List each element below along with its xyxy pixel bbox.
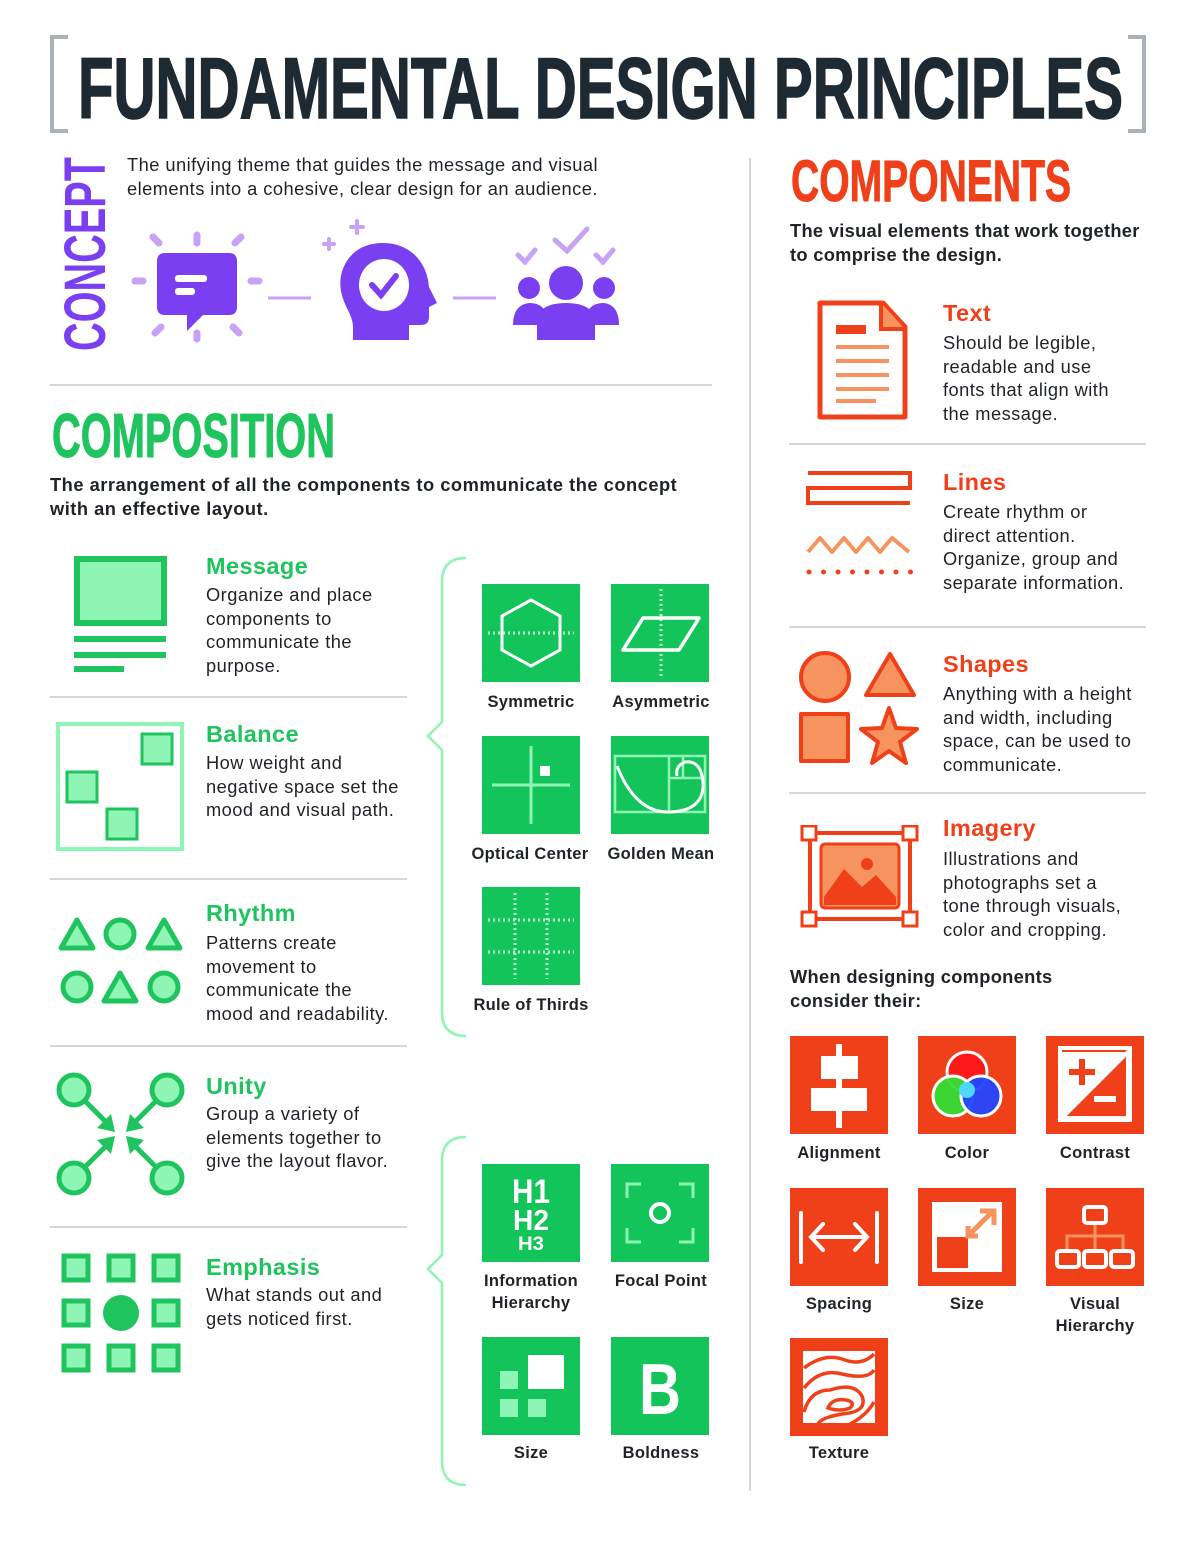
tile: texture (780, 1337, 898, 1467)
item: balance: negative space set the (206, 776, 399, 796)
item: unity: Group a variety of (206, 1103, 359, 1124)
tile: size (components) (908, 1187, 1026, 1317)
item: text: fonts that align with (943, 379, 1109, 400)
tile: spacing (780, 1187, 898, 1317)
icon: audience (513, 229, 619, 340)
tile: rule of thirds (473, 887, 589, 1014)
item: shapes: communicate. (943, 754, 1062, 774)
tile: information hierarchy (482, 1164, 580, 1312)
icon: unity (56, 1072, 184, 1196)
icon: imagery (800, 825, 918, 928)
tile: information hierarchy: H1 (512, 1173, 550, 1211)
item: rhythm (58, 900, 389, 1024)
tile: rule of thirds: Rule of Thirds (473, 996, 589, 1014)
item: emphasis (62, 1254, 382, 1372)
item: text (818, 300, 1109, 424)
tile: information hierarchy: Information (484, 1272, 578, 1290)
tile: visual hierarchy: Visual (1070, 1295, 1120, 1313)
icon: lines (806, 471, 913, 574)
icon: rhythm (58, 918, 182, 1004)
concept description (127, 154, 598, 199)
tile: information hierarchy: H2 (513, 1205, 549, 1237)
icon: head with check (324, 221, 437, 340)
item: text: Should be legible, (943, 332, 1096, 353)
tile: symmetric: Symmetric (487, 693, 575, 711)
item: unity: give the layout flavor. (206, 1150, 388, 1171)
item: lines (806, 469, 1124, 593)
item: emphasis: What stands out and (206, 1284, 382, 1305)
item: imagery: color and cropping. (943, 918, 1107, 940)
brace: layout types (426, 556, 466, 1038)
composition description: with an effective layout. (50, 498, 269, 518)
tile: size (482, 1337, 580, 1462)
tile: optical center (472, 736, 588, 863)
item: shapes (799, 651, 1132, 774)
tile: size: Size (514, 1444, 548, 1462)
concept description: elements into a cohesive, clear design for an audience. (127, 178, 598, 198)
item: rhythm: communicate the (206, 979, 352, 1000)
item: unity (56, 1072, 388, 1196)
tile: visual hierarchy (1036, 1187, 1154, 1337)
tile: texture: Texture (809, 1444, 869, 1462)
tile: color: Color (945, 1144, 989, 1162)
item: emphasis: gets noticed first. (206, 1308, 353, 1328)
item: text: Text (943, 300, 991, 326)
tile: focal point: Focal Point (615, 1272, 707, 1290)
item: imagery (800, 815, 1121, 940)
item: imagery: Illustrations and (943, 848, 1079, 869)
item: lines: direct attention. (943, 524, 1076, 546)
components description: to comprise the design. (790, 244, 1002, 264)
consider text (790, 966, 1052, 1010)
item: imagery: Imagery (943, 815, 1036, 841)
item: balance: Balance (206, 721, 299, 747)
item: rhythm: movement to (206, 956, 317, 976)
components description: The visual elements that work together (790, 220, 1140, 241)
components description (790, 220, 1140, 265)
composition description: The arrangement of all the components to communicate the concept (50, 474, 677, 495)
item: lines: Organize, group and (943, 548, 1118, 569)
item: message: components to (206, 608, 332, 628)
consider text: When designing components (790, 966, 1052, 987)
tile: color (918, 1036, 1016, 1162)
tile: optical center: Optical Center (472, 845, 588, 863)
icon: emphasis (62, 1254, 180, 1372)
item: unity: elements together to (206, 1126, 382, 1148)
item: lines: Create rhythm or (943, 501, 1087, 522)
icon: speech bubble (135, 235, 259, 339)
tile: visual hierarchy: Hierarchy (1056, 1317, 1134, 1335)
tile: alignment (790, 1036, 888, 1162)
item: balance: How weight and (206, 752, 342, 773)
item: message: Message (206, 553, 308, 579)
icon: shapes (799, 651, 919, 766)
tile: boldness: B (639, 1350, 681, 1430)
item: lines: Lines (943, 469, 1006, 495)
item: message: communicate the (206, 631, 352, 652)
item: unity: Unity (206, 1073, 267, 1099)
item: rhythm: Rhythm (206, 900, 296, 926)
tile: asymmetric: Asymmetric (612, 693, 710, 711)
tile: golden mean (608, 736, 714, 863)
item: balance (56, 721, 399, 851)
item: message: Organize and place (206, 584, 373, 605)
tile: information hierarchy: Hierarchy (492, 1294, 570, 1312)
tile: symmetric (482, 584, 580, 711)
icon: message (74, 556, 167, 672)
item: imagery: tone through visuals, (943, 895, 1121, 916)
item: message (74, 553, 373, 676)
item: text: the message. (943, 402, 1058, 424)
tile: information hierarchy: H3 (518, 1234, 544, 1255)
item: imagery: photographs set a (943, 872, 1097, 892)
tile: focal point (611, 1164, 709, 1290)
tile: boldness: Boldness (623, 1444, 699, 1462)
item: shapes: Shapes (943, 651, 1029, 677)
tile: size (components): Size (950, 1295, 984, 1313)
tile: contrast (1036, 1036, 1154, 1166)
tile: boldness (611, 1337, 709, 1462)
item: rhythm: Patterns create (206, 932, 337, 953)
item: rhythm: mood and readability. (206, 1002, 389, 1024)
item: lines: separate information. (943, 572, 1124, 592)
icon: document (818, 300, 908, 420)
concept description: The unifying theme that guides the message and visual (127, 154, 598, 175)
composition description (50, 474, 677, 519)
tile: contrast: Contrast (1060, 1144, 1130, 1162)
item: emphasis: Emphasis (206, 1254, 320, 1280)
item: text: readable and use (943, 356, 1092, 376)
icon: balance (56, 722, 184, 851)
tile: spacing: Spacing (806, 1295, 872, 1313)
tile: golden mean: Golden Mean (608, 845, 714, 863)
tile: alignment: Alignment (797, 1144, 881, 1162)
concept icons (132, 219, 619, 342)
consider text: consider their: (790, 990, 921, 1010)
tile: asymmetric (611, 584, 710, 711)
item: shapes: and width, including (943, 706, 1113, 728)
item: balance: mood and visual path. (206, 799, 394, 820)
item: shapes: Anything with a height (943, 683, 1132, 704)
item: shapes: space, can be used to (943, 730, 1131, 751)
item: message: purpose. (206, 654, 281, 676)
brace: emphasis types (426, 1136, 466, 1486)
